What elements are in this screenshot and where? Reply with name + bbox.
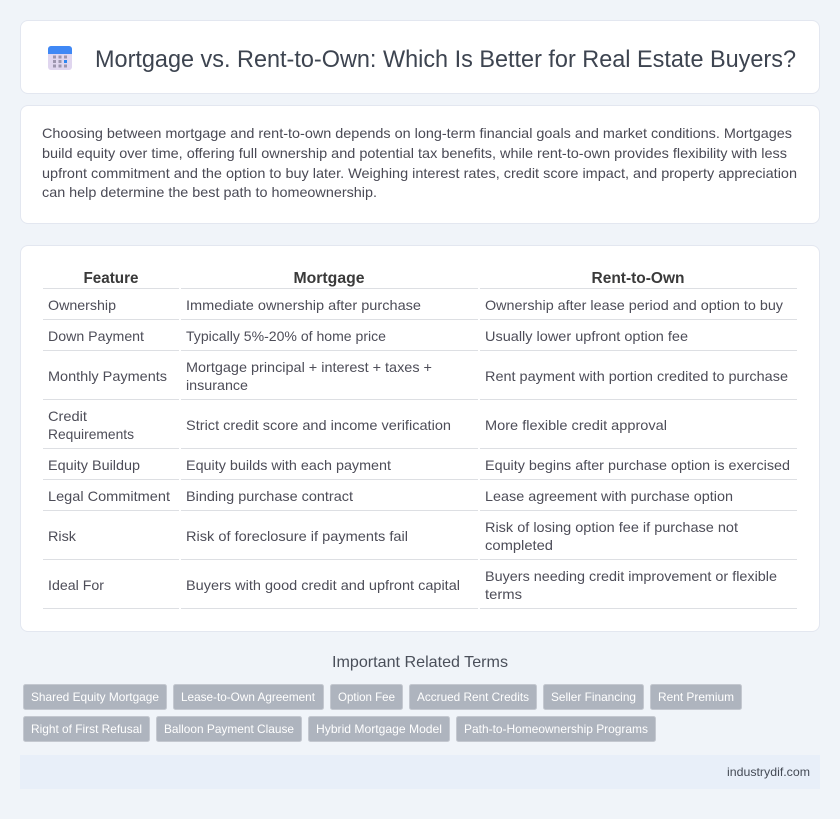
- panel: intro card: [20, 105, 820, 224]
- table header: Rent-to-Own: [592, 270, 684, 287]
- tag: Right of First Refusal: [24, 716, 150, 742]
- tag: Option Fee: [330, 684, 402, 710]
- tag: Right of First Refusal: Right of First Refusal: [31, 722, 142, 736]
- tag: Seller Financing: Seller Financing: [551, 690, 636, 704]
- row: credit requirements: Requirements: [48, 426, 134, 442]
- related term tags: [24, 684, 742, 742]
- tag: Path-to-Homeownership Programs: [456, 716, 656, 742]
- tag: Shared Equity Mortgage: Shared Equity Mortgage: [31, 690, 159, 704]
- table header: [84, 270, 684, 287]
- tag: Lease-to-Own Agreement: Lease-to-Own Agreement: [181, 690, 316, 704]
- tag: Balloon Payment Clause: [156, 716, 302, 742]
- title: Mortgage vs. Rent-to-Own: Which Is Better for Real Estate Buyers?: [95, 46, 796, 73]
- row: ownership: Immediate ownership after purchase: [186, 297, 421, 313]
- row: monthly payments: Rent payment with portion credited to purchase: [485, 368, 788, 384]
- row: legal commitment: Lease agreement with purchase option: [485, 488, 733, 504]
- row: credit requirements: Strict credit score and income verification: [186, 417, 451, 433]
- row: down payment: Usually lower upfront option fee: [485, 328, 688, 344]
- row: equity buildup: Equity Buildup: [48, 457, 140, 473]
- tag: Seller Financing: [544, 684, 644, 710]
- tag: Lease-to-Own Agreement: [174, 684, 324, 710]
- row: risk: Risk of losing option fee if purchase not: [485, 519, 738, 535]
- row: risk: Risk of foreclosure if payments fail: [186, 528, 408, 544]
- row: equity buildup: [48, 457, 790, 473]
- row: monthly payments: Mortgage principal + interest + taxes +: [186, 359, 432, 375]
- panel: title card: [20, 20, 820, 94]
- row: credit requirements: [48, 408, 667, 442]
- row: monthly payments: insurance: [186, 377, 248, 393]
- tag: Shared Equity Mortgage: [24, 684, 166, 710]
- comparison table: [43, 270, 797, 608]
- row: ideal for: Ideal For: [48, 577, 104, 593]
- row: equity buildup: Equity builds with each payment: [186, 457, 391, 473]
- intro paragraph: Choosing between mortgage and rent-to-own depends on long-term financial goals and market conditions. Mortgages: [42, 125, 792, 141]
- tag: Option Fee: Option Fee: [338, 690, 395, 704]
- intro paragraph: upfront commitment and the option to buy later. Weighing interest rates, credit score impact, and property appreciation: [42, 165, 797, 181]
- row: ideal for: Buyers needing credit improvement or flexible: [485, 568, 777, 584]
- tag: Hybrid Mortgage Model: [308, 716, 450, 742]
- row: legal commitment: Binding purchase contract: [186, 488, 353, 504]
- tag: Accrued Rent Credits: [410, 684, 536, 710]
- tag: Accrued Rent Credits: Accrued Rent Credits: [417, 690, 529, 704]
- row: legal commitment: Legal Commitment: [48, 488, 170, 504]
- intro paragraph: build equity over time, offering full ownership and potential tax benefits, while rent-to-own provides flexibility with less: [42, 145, 787, 161]
- tag: Hybrid Mortgage Model: Hybrid Mortgage Model: [316, 722, 442, 736]
- tag: Rent Premium: [650, 684, 742, 710]
- row: legal commitment: [48, 488, 733, 504]
- tag: Rent Premium: Rent Premium: [658, 690, 734, 704]
- row: ownership: [48, 297, 783, 313]
- row: ideal for: [48, 568, 777, 602]
- row: equity buildup: Equity begins after purchase option is exercised: [485, 457, 790, 473]
- row: monthly payments: Monthly Payments: [48, 368, 167, 384]
- row: down payment: Typically 5%-20% of home price: [186, 328, 386, 344]
- row: monthly payments: [48, 359, 788, 393]
- row: risk: completed: [485, 537, 553, 553]
- tag: Balloon Payment Clause: Balloon Payment Clause: [164, 722, 294, 736]
- row: ownership: Ownership after lease period and option to buy: [485, 297, 783, 313]
- icon: calendar: [48, 46, 72, 70]
- footer source text: industrydif.com: [727, 765, 810, 779]
- row: credit requirements: Credit: [48, 408, 87, 424]
- row: down payment: Down Payment: [48, 328, 144, 344]
- panel: comparison table card: [20, 245, 820, 632]
- row: down payment: [48, 328, 688, 344]
- table header: Feature: [84, 270, 139, 287]
- table header: Mortgage: [294, 270, 365, 287]
- row: risk: Risk: [48, 528, 77, 544]
- row: ideal for: Buyers with good credit and upfront capital: [186, 577, 460, 593]
- row: credit requirements: More flexible credit approval: [485, 417, 667, 433]
- intro paragraph: can help determine the best path to homeownership.: [42, 184, 377, 200]
- tag: Path-to-Homeownership Programs: Path-to-Homeownership Programs: [464, 722, 648, 736]
- row: ideal for: terms: [485, 586, 522, 602]
- footer band: [20, 755, 820, 789]
- intro paragraph: [42, 125, 797, 200]
- row: ownership: Ownership: [48, 297, 116, 313]
- related terms heading: Important Related Terms: [332, 654, 508, 671]
- row: risk: [48, 519, 738, 553]
